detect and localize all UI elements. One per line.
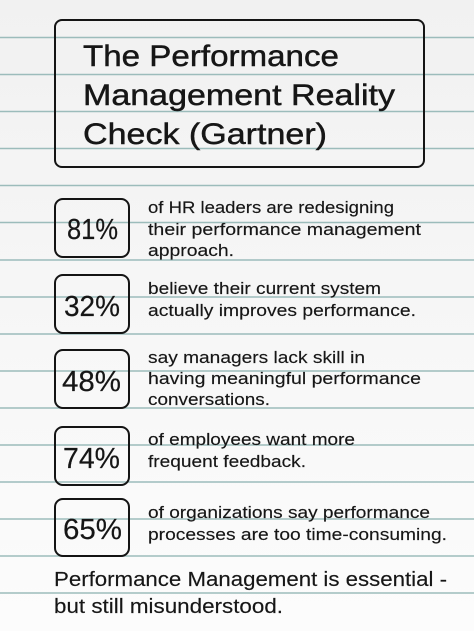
- stat: 81%: 81%: [67, 214, 118, 246]
- closing statement: but still misunderstood.: [54, 596, 283, 618]
- stat: 48%: [55, 348, 421, 409]
- stat text: 74%: [148, 430, 355, 471]
- stat text: 32%: [148, 279, 416, 320]
- stat: 32%: [55, 275, 416, 333]
- stat text: 74%: frequent feedback.: [148, 452, 306, 471]
- title: The Performance: [83, 40, 339, 73]
- stat text: 81%: [148, 198, 421, 260]
- stat text: 32%: actually improves performance.: [148, 301, 416, 320]
- stat text: 32%: believe their current system: [148, 279, 381, 298]
- stat text: 48%: say managers lack skill in: [148, 348, 365, 367]
- stat: 32%: 32%: [64, 291, 120, 323]
- closing statement: Performance Management is essential -: [54, 569, 447, 591]
- title: Management Reality: [83, 79, 395, 112]
- stat text: 65%: of organizations say performance: [148, 503, 430, 522]
- title panel: [55, 20, 424, 167]
- closing statement: [54, 569, 447, 618]
- stat text: 48%: conversations.: [148, 390, 270, 409]
- stat text: 48%: [148, 348, 421, 409]
- stat: 74%: 74%: [63, 443, 120, 475]
- stat: 65%: 65%: [63, 514, 122, 546]
- stat: 48%: 48%: [62, 366, 121, 398]
- stat text: 65%: processes are too time-consuming.: [148, 525, 447, 544]
- stat text: 81%: their performance management: [148, 220, 421, 239]
- stat: 81%: [55, 198, 421, 260]
- stat: 65%: [55, 499, 447, 556]
- stat text: 81%: approach.: [148, 241, 234, 260]
- stat text: 74%: of employees want more: [148, 430, 355, 449]
- stat text: 48%: having meaningful performance: [148, 369, 421, 388]
- title: [83, 40, 395, 151]
- title: Check (Gartner): [83, 118, 327, 151]
- stat text: 65%: [148, 503, 447, 544]
- stat text: 81%: of HR leaders are redesigning: [148, 198, 394, 217]
- stat: 74%: [55, 427, 355, 485]
